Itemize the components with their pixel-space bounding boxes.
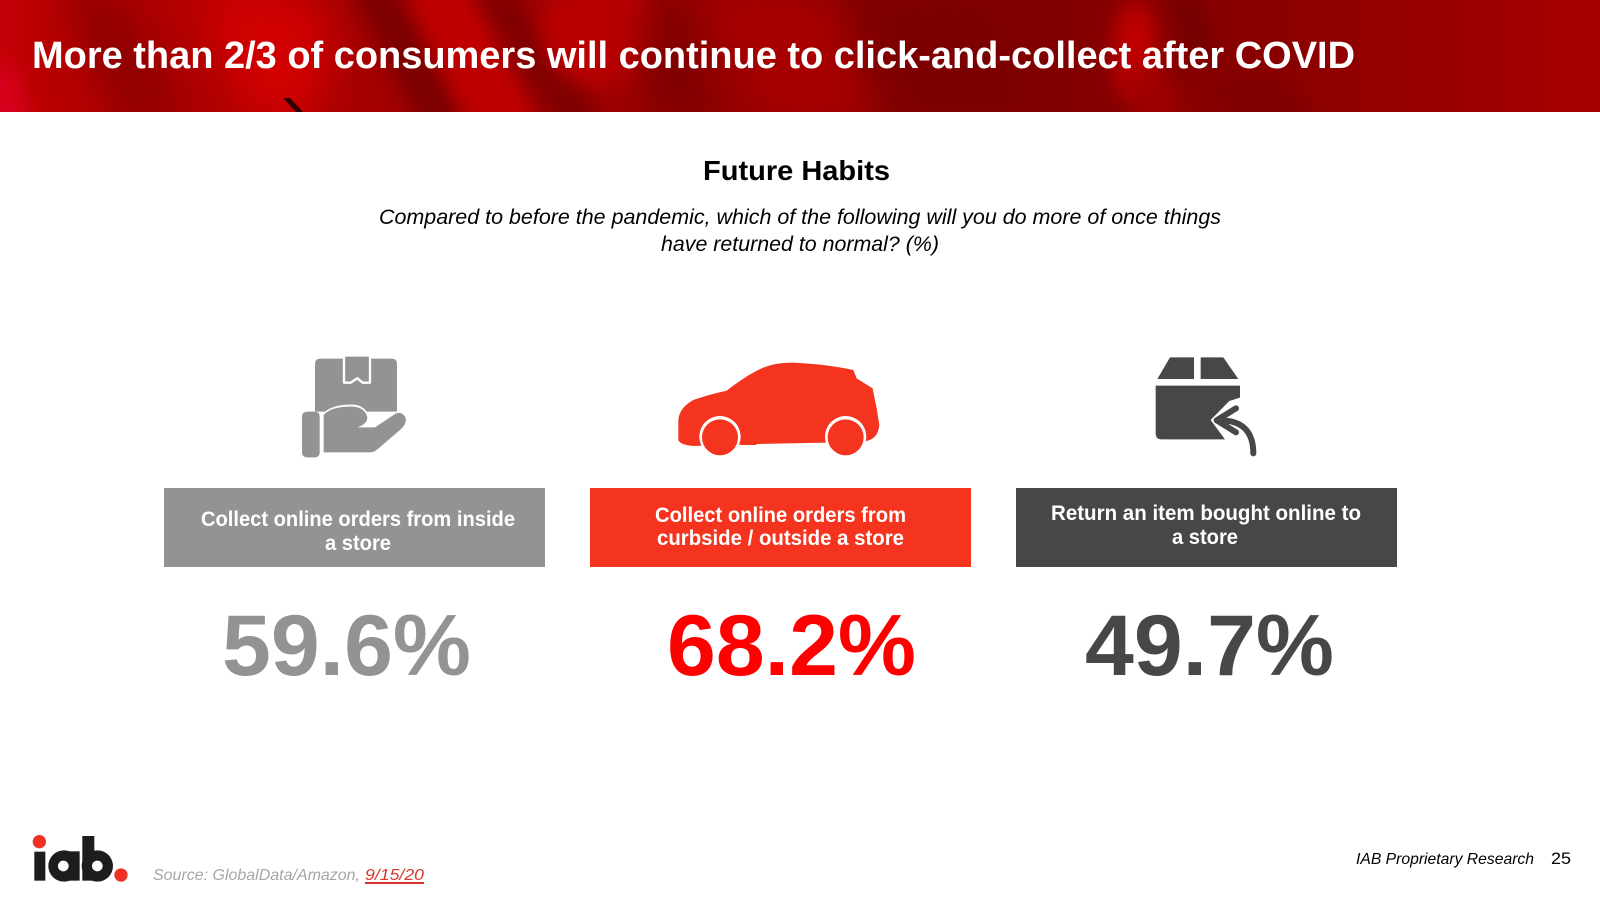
- panel: collect curbside: [590, 488, 971, 567]
- icon: package in hand: [302, 357, 413, 457]
- header banner: [0, 0, 1600, 112]
- panel: return an item: [1016, 488, 1397, 567]
- panel label: a store: [1172, 526, 1238, 549]
- iab logo: [33, 835, 128, 882]
- icon: car: [678, 363, 879, 457]
- title: More than 2/3 of consumers will continue to click-and-collect after COVID: [32, 35, 1355, 77]
- survey question: [379, 206, 1221, 256]
- page number: 25: [1551, 849, 1571, 868]
- panel label: curbside / outside a store: [657, 527, 904, 550]
- stat: 49.7%: 49.7%: [1085, 598, 1334, 694]
- panel label: Return an item bought online to: [1051, 502, 1361, 525]
- source note: 9/15/20: [365, 867, 424, 884]
- panel label: [655, 504, 906, 550]
- survey question: Compared to before the pandemic, which of the following will you do more of once things: [379, 206, 1221, 229]
- stat: 59.6%: 59.6%: [222, 598, 471, 694]
- source note: Source: GlobalData/Amazon,: [153, 867, 360, 884]
- panel label: Collect online orders from: [655, 504, 906, 527]
- survey question: have returned to normal? (%): [661, 233, 939, 256]
- panel label: [1051, 502, 1361, 549]
- panel: collect inside a store: [164, 488, 545, 567]
- panel label: a store: [325, 532, 391, 555]
- panel label: [201, 508, 515, 555]
- panel label: Collect online orders from inside: [201, 508, 515, 531]
- icon: return parcel: [1156, 357, 1253, 453]
- stat: 68.2%: 68.2%: [667, 598, 916, 694]
- section heading: Future Habits: [703, 155, 890, 186]
- footer label: IAB Proprietary Research: [1356, 851, 1534, 868]
